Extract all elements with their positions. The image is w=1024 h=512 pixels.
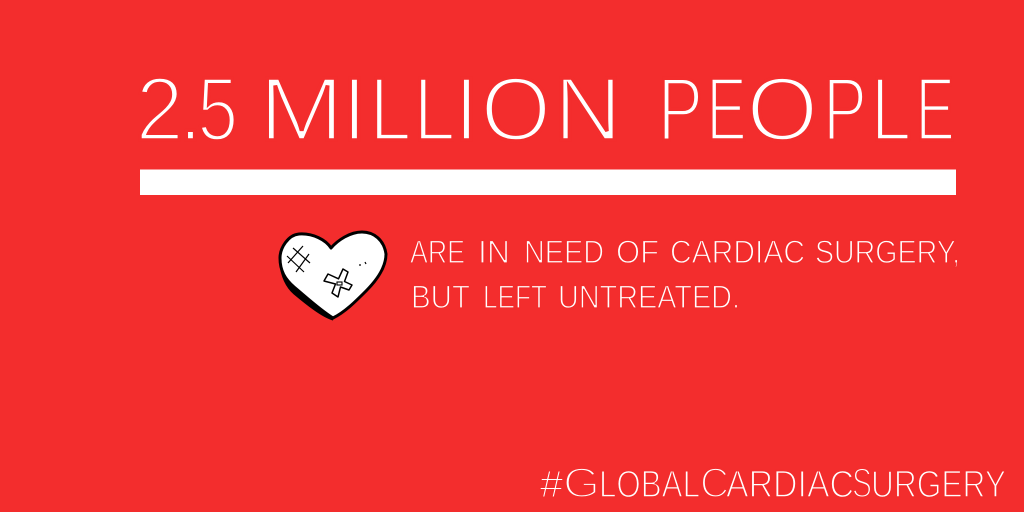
bandage: [324, 269, 352, 297]
title: O: [481, 60, 551, 160]
white divider bar: [140, 170, 956, 195]
title: N: [554, 60, 622, 160]
hashtag: ARDIAC: [726, 464, 854, 506]
subtitle text: LEFT: [483, 279, 547, 315]
subtitle text: CARDIAC: [670, 234, 805, 270]
hashtag: [540, 459, 1006, 506]
title: I: [342, 60, 367, 160]
subtitle text: UNTREATED.: [558, 279, 740, 315]
scar cross-hatch: [287, 246, 310, 272]
hashtag: LOBAL: [599, 464, 700, 506]
title: L: [871, 60, 911, 160]
title: P: [823, 60, 867, 160]
title: M: [259, 60, 344, 160]
title: 5: [197, 60, 238, 160]
hashtag: S: [852, 459, 872, 506]
bandage pad: [337, 282, 342, 285]
hashtag: #: [540, 464, 563, 506]
subtitle text: [410, 234, 960, 315]
hashtag: C: [700, 459, 729, 506]
title: P: [658, 60, 703, 160]
title: I: [454, 60, 479, 160]
title: O: [747, 60, 818, 160]
title: L: [414, 60, 455, 160]
title: E: [916, 60, 954, 160]
title: 2: [136, 60, 184, 160]
subtitle text: NEED: [524, 234, 604, 270]
subtitle text: SURGERY,: [815, 234, 960, 270]
title: .: [179, 60, 202, 160]
small ticks: [360, 262, 366, 266]
subtitle text: IN: [478, 234, 510, 270]
subtitle text: OF: [616, 234, 659, 270]
hashtag: G: [563, 459, 600, 506]
title: [136, 60, 954, 160]
subtitle text: ARE: [410, 234, 465, 270]
icon: patched heart: [280, 232, 386, 320]
title: L: [370, 60, 411, 160]
subtitle text: BUT: [411, 279, 470, 315]
title: E: [706, 60, 746, 160]
